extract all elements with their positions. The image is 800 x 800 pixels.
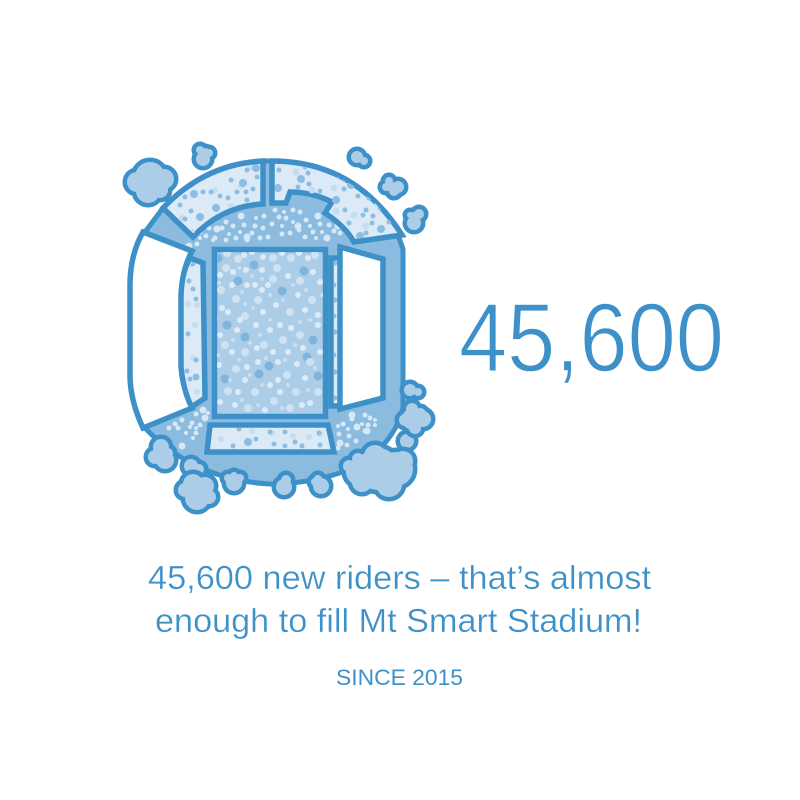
stand: top left — [163, 161, 263, 237]
cloud: right small top — [404, 384, 422, 396]
big number: 45,600 — [459, 283, 724, 392]
cloud: top right 2 — [382, 177, 404, 196]
since label: SINCE 2015 — [336, 665, 463, 690]
cloud: bottom 4 — [224, 472, 244, 491]
infographic canvas — [122, 142, 720, 685]
crowd dots on concourse — [169, 210, 375, 448]
cloud: bottom small — [184, 459, 204, 474]
cloud: bottom 5 — [276, 475, 292, 495]
cloud: bottom left — [148, 439, 174, 469]
stadium body — [145, 161, 403, 484]
playing field with crowd — [214, 250, 326, 416]
cloud: bottom medium — [178, 474, 216, 510]
stand: left white — [130, 232, 192, 428]
caption line 1: 45,600 new riders – that’s almost — [148, 559, 651, 596]
stand: right white — [340, 247, 383, 409]
cloud: right small behind — [400, 434, 414, 448]
cloud: top right 3 — [407, 209, 424, 230]
stand: top right — [272, 161, 402, 242]
cloud: bottom 6 — [311, 475, 329, 494]
stadium illustration — [127, 146, 431, 510]
caption line 2: enough to fill Mt Smart Stadium! — [155, 602, 642, 639]
stand: left inner strip — [180, 258, 205, 408]
cloud: top small — [196, 146, 213, 166]
stand: right inner strip — [331, 258, 341, 406]
cloud: right medium — [399, 403, 431, 434]
cloud: top right 1 — [351, 151, 368, 165]
cloud: top left large — [127, 162, 174, 203]
cloud: bottom right large — [343, 445, 413, 497]
stand: bottom — [207, 425, 334, 452]
